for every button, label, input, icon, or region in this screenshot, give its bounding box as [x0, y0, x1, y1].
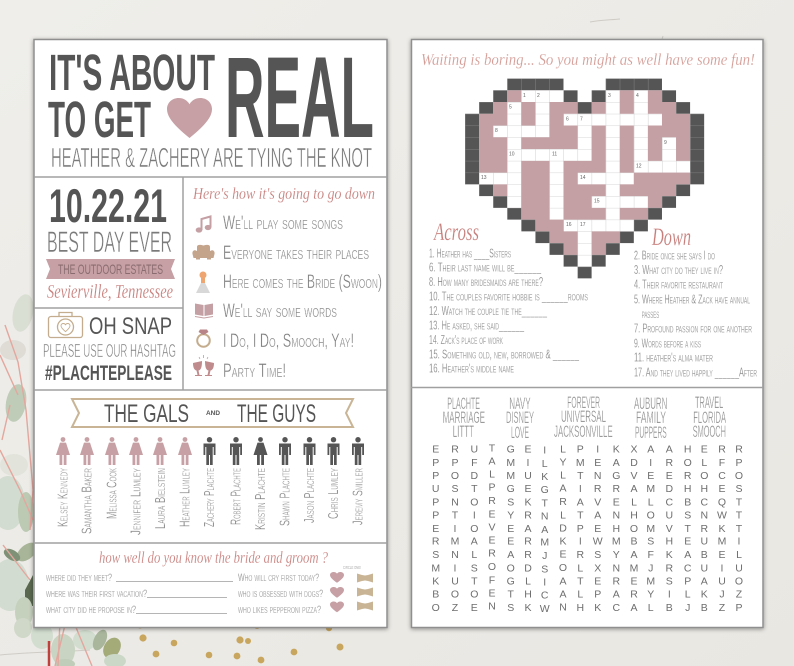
- down clues: 11. heather's alma mater: [634, 350, 713, 365]
- quiz: how well do you know the bride and groom: CIRCLE ONE!: [343, 565, 361, 570]
- banner: the gals and the guys: THE GALS: [104, 400, 189, 428]
- hashtag block: OH SNAP: [89, 313, 172, 340]
- down clues: 4. Their favorite restaurant: [634, 277, 723, 292]
- word search word bank: NAVY: [509, 394, 531, 413]
- down clues: 2. Bride once she says I do: [634, 247, 715, 262]
- panel: games: [411, 40, 763, 628]
- across clues: 10. The couples favorite hobbie is ______rooms: [429, 289, 588, 304]
- party names: Jeremy Smiller: [350, 468, 366, 525]
- crossword numbers: 8: [495, 128, 498, 134]
- panel: games: TRAVEL: [695, 393, 723, 412]
- word search letter grid: BOOETHCALPARYILKJZ: [432, 587, 743, 602]
- word search letter grid: KUTFGLIATEREMSPAUO: [432, 574, 743, 589]
- party names: Kristin Plachte: [253, 468, 269, 530]
- panel: games: FLORIDA: [693, 408, 726, 427]
- schedule list: We'll say some words: [223, 301, 337, 322]
- word search word bank: JACKSONVILLE: [554, 422, 613, 441]
- crossword: pixel heart: [465, 78, 704, 278]
- party names: Robert Plachte: [228, 468, 244, 525]
- bridesmaids: [56, 437, 192, 465]
- word search word bank: FAMILY: [636, 408, 666, 427]
- party names: Chris Lumley: [326, 468, 342, 519]
- quiz: how well do you know the bride and groom: what city did he propose in?: [46, 604, 136, 616]
- schedule list: I Do, I Do, Smooch, Yay!: [223, 331, 354, 352]
- word search letter grid: MISOODSOLXNMJRCUIU: [431, 561, 743, 575]
- icon: ring: [197, 330, 210, 347]
- quiz: how well do you know the bride and groom: [46, 548, 373, 616]
- icon: bride: [196, 272, 210, 293]
- party names: Shawn Plachte: [278, 468, 294, 526]
- down clues: 9. Words before a kiss: [634, 335, 701, 350]
- crossword numbers: 1: [523, 93, 526, 99]
- word search word bank: MARRIAGE: [443, 408, 485, 427]
- across clues: 15. Something old, new, borrowed & ______: [429, 346, 579, 361]
- word search letter grid: PTIEYRNLTANHOUSNWT: [432, 508, 743, 523]
- word search letter grid: RMAEERMKIWMBSHEUMI: [432, 534, 740, 549]
- crossword numbers: 13: [481, 175, 487, 181]
- across clues: 8. How many bridesmaids are there?: [429, 274, 543, 289]
- icon: camera: [48, 312, 82, 338]
- schedule heading: Here's how it's going to go down: [192, 184, 375, 203]
- schedule list: Party Time!: [223, 361, 286, 382]
- across clues: 16. Heather's middle name: [429, 361, 514, 376]
- decoration: gold confetti dots: [137, 623, 344, 663]
- icon: clinking glasses: [193, 355, 214, 376]
- crossword numbers: 2: [537, 93, 540, 99]
- party names: Zachery Plachte: [202, 468, 218, 527]
- date block: 10.22.21: [49, 179, 167, 232]
- quiz: how well do you know the bride and groom: who is obsessed with dogs?: [238, 588, 323, 600]
- icons: bow ties: [357, 574, 373, 610]
- word search letter grid: PODLMUKLTNGVEEROCO: [432, 469, 743, 483]
- word search word bank: PUPPERS: [635, 423, 667, 442]
- title: [48, 34, 374, 162]
- crossword numbers: 12: [636, 163, 642, 169]
- word search word bank: LOVE: [511, 423, 529, 442]
- word search word bank: DISNEY: [506, 408, 534, 427]
- word search letter grid: PNORSKTRAVELLCBCQT: [432, 495, 743, 509]
- crossword numbers: 3: [608, 93, 611, 99]
- across clues: 12. Watch the couple tie the______: [429, 303, 547, 318]
- word search letter grid: PPFAMILYMEADIROLFP: [432, 456, 743, 470]
- crossword numbers: 16: [566, 222, 572, 228]
- party names: Kelsey Kennedy: [56, 468, 72, 527]
- word search letter grid: ERUTGEILPIKXAAHERR: [432, 442, 743, 457]
- hashtag block: PLEASE USE OUR HASHTAG: [43, 341, 176, 361]
- word search word bank: LITTT: [453, 422, 474, 441]
- word search letter grid: USTPGEGAIRRAMDHHES: [432, 482, 743, 496]
- groomsmen: [204, 437, 364, 465]
- heading: down: Down: [651, 224, 691, 251]
- word search letter grid: [431, 442, 743, 615]
- icon: open book: [195, 304, 213, 318]
- word search letter grid: EIOVEAADPEHOMVTRKT: [432, 522, 743, 536]
- down clues: passes: [642, 306, 659, 321]
- schedule list: Everyone takes their places: [223, 243, 369, 264]
- date block: BEST DAY EVER: [47, 226, 172, 259]
- crossword numbers: 5: [509, 104, 512, 110]
- heading: across: Across: [433, 219, 479, 246]
- quiz: how well do you know the bride and groom: Who will cry first today?: [238, 572, 319, 584]
- bridal party icons: [56, 437, 364, 465]
- party names: Heather Lumley: [178, 468, 194, 527]
- word search word bank: FOREVER: [567, 393, 600, 412]
- panel: games: SMOOCH: [693, 422, 726, 441]
- date block: THE OUTDOOR ESTATES: [58, 261, 163, 277]
- schedule list: [192, 213, 382, 382]
- crossword numbers: 6: [566, 116, 569, 122]
- crossword numbers: 15: [594, 199, 600, 205]
- across clues: [429, 245, 588, 376]
- word search letter grid: OZENSKWNHKCALBJBZP: [432, 601, 743, 615]
- across clues: 13. He asked, she said______: [429, 317, 524, 332]
- schedule list: We'll play some songs: [223, 213, 343, 234]
- icon: music note: [196, 216, 211, 233]
- quiz: how well do you know the bride and groom: where was their first vacation?: [46, 588, 147, 600]
- across clues: 6. Their last name will be______: [429, 260, 541, 275]
- quiz: how well do you know the bride and groom: where did they meet?: [46, 572, 112, 584]
- decoration: eucalyptus leaves and stems: [0, 292, 126, 666]
- schedule list: Here comes the Bride (Swoon): [223, 272, 382, 293]
- quiz: how well do you know the bride and groom: how well do you know the bride and groom ?: [99, 548, 328, 567]
- icons: hearts: [330, 572, 344, 612]
- down clues: 3. What city do they live in?: [634, 262, 723, 277]
- icon: sofa: [192, 245, 215, 260]
- panel: wedding infographic: REAL: [225, 34, 374, 162]
- date block: Sevierville, Tennessee: [47, 281, 173, 303]
- crossword numbers: 4: [636, 93, 639, 99]
- across clues: 14. Zack's place of work: [429, 332, 503, 347]
- word search letter grid: SNLRARJERSYAFKABEL: [432, 548, 742, 562]
- title: IT'S ABOUT: [49, 44, 215, 101]
- party names: Laura Bielstein: [153, 468, 169, 529]
- crossword numbers: [481, 93, 667, 228]
- quiz: how well do you know the bride and groom: who likes pepperoni pizza?: [238, 604, 321, 616]
- word search word bank: UNIVERSAL: [561, 407, 606, 426]
- hashtag block: #PLACHTEPLEASE: [45, 362, 172, 385]
- party names: Jason Plachte: [302, 468, 318, 523]
- crossword numbers: 9: [664, 140, 667, 146]
- word search word bank: PLACHTE: [447, 394, 480, 413]
- heading: waiting is boring: Waiting is boring... So you might as well have some fun!: [421, 50, 755, 69]
- party names: Jennifer Lumley: [128, 468, 144, 535]
- panel: wedding infographic: [34, 34, 387, 628]
- crossword numbers: 10: [509, 152, 515, 158]
- banner: the gals and the guys: THE GUYS: [237, 400, 316, 428]
- date block: [46, 179, 175, 303]
- banner: the gals and the guys: [72, 399, 353, 428]
- party names: [56, 468, 366, 535]
- word search word bank: AUBURN: [634, 394, 667, 413]
- crossword numbers: 14: [580, 175, 586, 181]
- banner: the gals and the guys: AND: [206, 411, 221, 417]
- down clues: [634, 247, 757, 379]
- party names: Samantha Baker: [80, 468, 96, 534]
- crossword numbers: 7: [580, 116, 583, 122]
- crossword numbers: 17: [580, 222, 586, 228]
- word search word bank: [443, 393, 726, 442]
- subtitle: HEATHER & ZACHERY ARE TYING THE KNOT: [51, 142, 372, 173]
- across clues: 1. Heather has ____Sisters: [429, 245, 511, 260]
- party names: Melissa Cook: [104, 468, 120, 519]
- crossword numbers: 11: [552, 152, 557, 158]
- title: TO GET: [48, 91, 151, 148]
- hashtag block: [43, 312, 176, 385]
